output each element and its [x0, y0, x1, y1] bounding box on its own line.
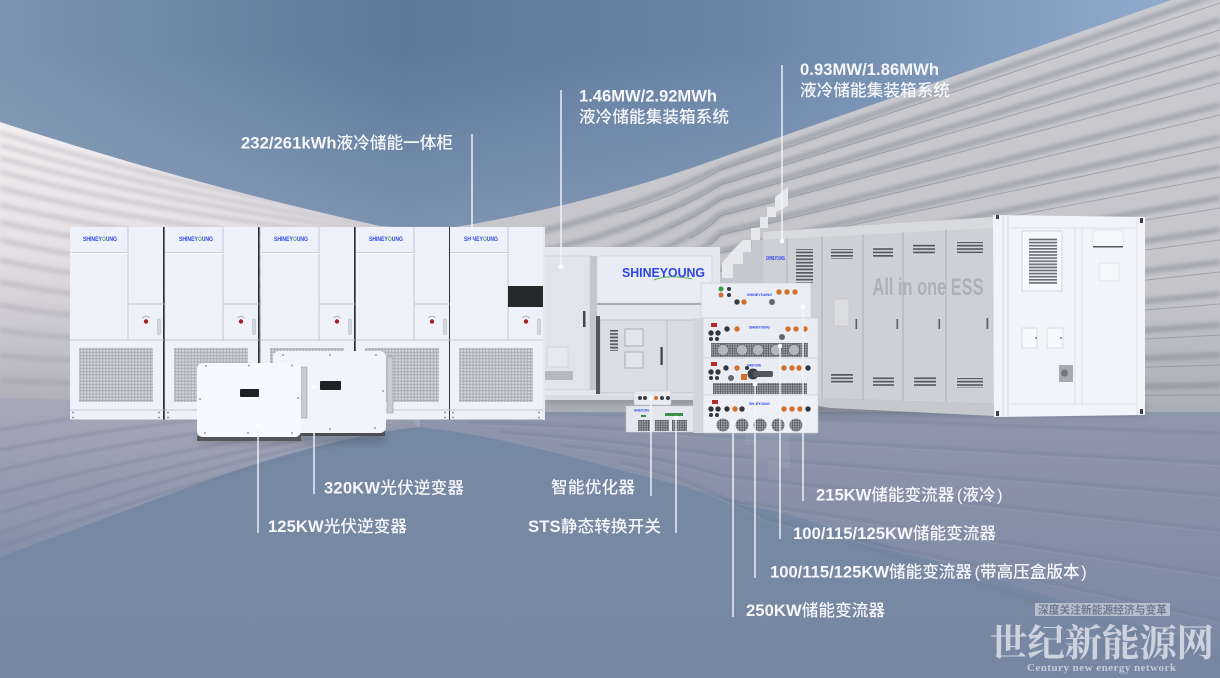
- callout: 100/115/125KW PCS: [778, 344, 996, 543]
- callout: 100/115/125KW PCS with HV box: 100/115/125KW储能变流器(带高压盒版本): [770, 562, 1087, 582]
- callout: STS static transfer switch: [528, 416, 678, 536]
- product: STS static transfer switch: [626, 406, 699, 432]
- callout: 1.46MW/2.92MWh container: 液冷储能集装箱系统: [579, 108, 729, 126]
- product: smart optimizer: [634, 391, 671, 405]
- side vents: [796, 242, 983, 388]
- callout: 250KW PCS: [731, 421, 885, 620]
- callout: 1.46MW/2.92MWh container: 1.46MW/2.92MWh: [579, 86, 717, 106]
- module: 215KW liquid cooled PCS: SHINEYOUNG: [747, 292, 772, 297]
- cabinet 5 with display: SHINEYOUNG: [464, 236, 498, 243]
- cabinet 3: SHINEYOUNG: [274, 236, 308, 243]
- module: PCS with high-voltage box: SHINEYOUNG: [747, 362, 761, 368]
- product: STS static transfer switch: SHINEYOUNG: [634, 408, 649, 412]
- background: sky: [0, 0, 1220, 300]
- cabinet 5 with display: [450, 227, 545, 420]
- upper panel: [597, 256, 712, 303]
- cabinet 1: SHINEYOUNG: [83, 236, 117, 243]
- callout: 1.46MW/2.92MWh container: [559, 86, 729, 269]
- module: 250KW PCS: SHINEYOUNG: [749, 401, 770, 406]
- module: 100/115/125KW PCS: [703, 318, 818, 358]
- module: PCS with high-voltage box: [703, 358, 818, 395]
- decorative stairs: [722, 187, 790, 290]
- container end face: [993, 215, 1145, 417]
- container long side: [763, 227, 994, 404]
- faint stair reflection on floor: [745, 434, 790, 480]
- callout: 0.93MW/1.86MWh container: 液冷储能集装箱系统: [800, 81, 950, 100]
- product: 1.46MW/2.92MWh liquid-cooled ESS container: [540, 247, 720, 400]
- watermark tagline badge: 深度关注新能源经济与变革: [1038, 604, 1167, 616]
- product: five 232/261kWh liquid-cooled cabinets: [70, 227, 545, 420]
- large SHINEYOUNG logo: SHINEYOUNG: [622, 266, 705, 280]
- lower doors: [600, 320, 667, 393]
- product: stacked PCS rack: [693, 283, 818, 433]
- rack side rails: [693, 318, 703, 433]
- shadow under containers: [198, 397, 1145, 442]
- background: floor: [0, 380, 1220, 678]
- callout: 250KW PCS: 250KW储能变流器: [746, 600, 885, 620]
- cabinet 4: [356, 227, 451, 420]
- callout: smart optimizer: 智能优化器: [551, 478, 635, 497]
- product: 0.93MW/1.86MWh liquid-cooled ESS container: [763, 215, 1145, 417]
- watermark title: 世纪新能源网: [990, 623, 1214, 665]
- callout: 100/115/125KW PCS with HV box: [753, 382, 1087, 582]
- product: 125KW PV inverter: [197, 363, 307, 441]
- small side logo: SHINEYOUNG: [766, 256, 785, 262]
- callout: smart optimizer: [551, 396, 653, 497]
- callout: 320KW PV inverter: [312, 385, 464, 498]
- module: 100/115/125KW PCS: SHINEYOUNG: [749, 324, 770, 330]
- cabinet 1: [70, 227, 165, 420]
- side print: All in one ESS: [872, 274, 984, 301]
- product: 320KW PV inverter: [273, 351, 393, 436]
- callout: 215KW liquid-cooled PCS: 215KW储能变流器(液冷): [816, 484, 1003, 504]
- door handles: [856, 318, 988, 329]
- background: left curved wall: [0, 122, 394, 400]
- callout: 232/261kWh liquid-cooled cabinet: 232/261kWh液冷储能一体柜: [241, 134, 453, 152]
- left door: [543, 256, 590, 390]
- cabinet 3: [261, 227, 356, 420]
- callout: 100/115/125KW PCS: 100/115/125KW储能变流器: [793, 523, 996, 543]
- module: 215KW liquid cooled PCS: [701, 283, 811, 318]
- watermark: Century New Energy Network: [990, 603, 1214, 674]
- cabinet 2: [165, 227, 260, 420]
- callout: 125KW PV inverter: [256, 424, 407, 536]
- callout: 215KW liquid-cooled PCS: [801, 305, 1003, 504]
- background: right curved wall: [450, 0, 1220, 412]
- callout: 0.93MW/1.86MWh container: [780, 60, 950, 243]
- callout: 320KW PV inverter: 320KW光伏逆变器: [324, 478, 464, 498]
- callout: 232/261kWh liquid-cooled cabinet: [241, 134, 474, 244]
- watermark English name: Century new energy network: [1027, 662, 1177, 674]
- callout: STS static transfer switch: STS静态转换开关: [528, 517, 661, 536]
- callout: 0.93MW/1.86MWh container: 0.93MW/1.86MWh: [800, 60, 939, 79]
- module: 250KW PCS: [703, 395, 818, 433]
- cabinet 4: SHINEYOUNG: [369, 236, 403, 243]
- callout: 125KW PV inverter: 125KW光伏逆变器: [268, 516, 407, 536]
- cabinet 2: SHINEYOUNG: [179, 236, 213, 243]
